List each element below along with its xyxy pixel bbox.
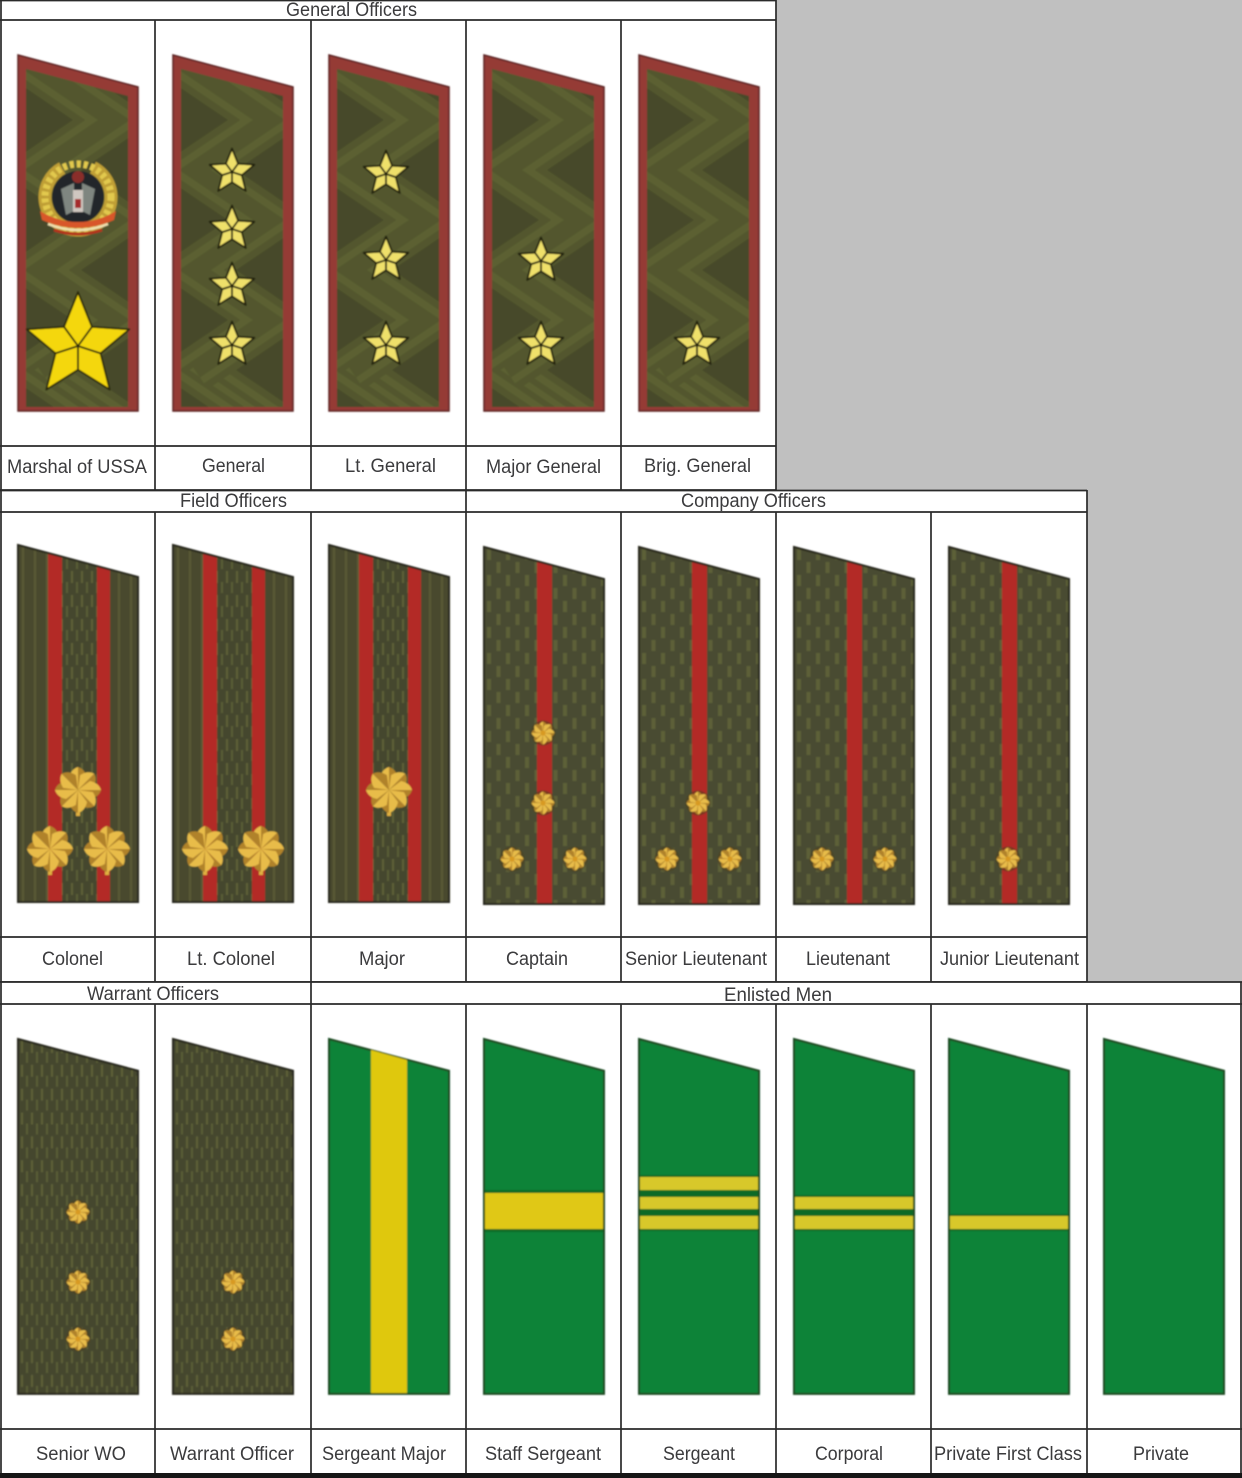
label: corporal: Corporal — [815, 1444, 883, 1465]
shoulder board: major — [329, 545, 449, 902]
heading: general officers: General Officers — [286, 0, 417, 21]
shoulder board: lieutenant — [794, 547, 914, 904]
panel: field and company officers — [0, 490, 1087, 982]
shoulder board: senior warrant officer — [18, 1039, 138, 1394]
label: junior lieutenant: Junior Lieutenant — [940, 949, 1080, 970]
shoulder board: marshal of USSA — [18, 20, 138, 470]
panel: warrant officers and enlisted men — [0, 982, 1242, 1478]
label: marshal: Marshal of USSA — [7, 457, 147, 478]
shoulder board: brigadier general — [639, 20, 759, 470]
panel: general officers — [0, 0, 776, 490]
label: sergeant: Sergeant — [663, 1444, 736, 1465]
label: lieutenant general: Lt. General — [345, 456, 436, 477]
shoulder board: private first class — [949, 1039, 1069, 1394]
shoulder board: junior lieutenant — [949, 547, 1069, 904]
label: lieutenant: Lieutenant — [806, 949, 891, 970]
shoulder board: sergeant — [639, 1039, 759, 1394]
shoulder board: corporal — [794, 1039, 914, 1394]
heading: enlisted men: Enlisted Men — [724, 985, 832, 1006]
label: senior warrant officer: Senior WO — [36, 1444, 126, 1465]
shoulder board: senior lieutenant — [639, 547, 759, 904]
label: brigadier general: Brig. General — [644, 456, 751, 477]
shoulder board: sergeant major — [329, 1039, 449, 1394]
icon: state emblem — [34, 153, 122, 241]
label: captain: Captain — [506, 949, 568, 970]
heading: field officers: Field Officers — [180, 491, 287, 512]
shoulder board: colonel — [18, 545, 138, 902]
shoulder board: general — [173, 20, 293, 470]
label: colonel: Colonel — [42, 949, 103, 970]
shoulder board: staff sergeant — [484, 1039, 604, 1394]
label: senior lieutenant: Senior Lieutenant — [625, 949, 768, 970]
label: private: Private — [1133, 1444, 1189, 1465]
label: general: General — [202, 456, 265, 477]
shoulder board: lieutenant colonel — [173, 545, 293, 902]
bottom edge — [0, 1473, 1242, 1478]
label: private first class: Private First Class — [934, 1444, 1082, 1465]
icon: marshal star — [27, 292, 129, 390]
shoulder board: major general — [484, 20, 604, 470]
shoulder board: captain — [484, 547, 604, 904]
label: staff sergeant: Staff Sergeant — [485, 1444, 602, 1465]
label: major general: Major General — [486, 457, 601, 478]
heading: company officers: Company Officers — [681, 491, 826, 512]
label: sergeant major: Sergeant Major — [322, 1444, 447, 1465]
label: lieutenant colonel: Lt. Colonel — [187, 949, 275, 970]
shoulder board: lieutenant general — [329, 20, 449, 470]
shoulder board: warrant officer — [173, 1039, 293, 1394]
heading: warrant officers: Warrant Officers — [87, 984, 219, 1005]
label: major: Major — [359, 949, 406, 970]
label: warrant officer: Warrant Officer — [170, 1444, 295, 1465]
shoulder board: private — [1104, 1039, 1224, 1394]
